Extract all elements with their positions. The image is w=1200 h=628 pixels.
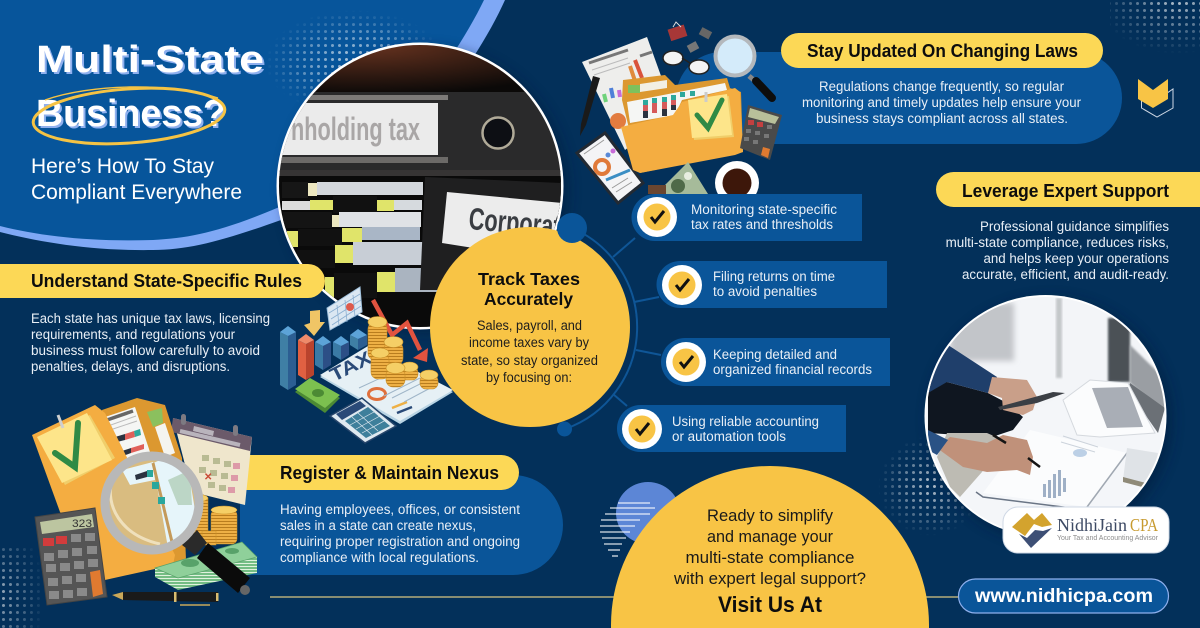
checklist item 2 — [656, 261, 887, 308]
body text: requirements, and regulations your — [31, 327, 235, 342]
heading: Understand State-Specific Rules — [31, 271, 302, 291]
section: Leverage Expert Support — [936, 172, 1200, 282]
coin stacks — [182, 494, 237, 545]
label TAX: TAX — [327, 348, 376, 386]
sticky note — [37, 413, 115, 485]
folder documents — [627, 83, 727, 123]
text: Using reliable accounting — [672, 414, 819, 429]
body text: monitoring and timely updates help ensure your — [802, 95, 1081, 110]
paper stacks — [282, 182, 448, 298]
text: Monitoring state-specific — [691, 202, 837, 217]
calendar: ✕ — [204, 472, 212, 483]
check icon — [662, 265, 702, 305]
folder back — [622, 75, 743, 173]
website pill: www.nidhicpa.com — [974, 585, 1153, 607]
upper sleeve — [926, 345, 997, 393]
checklist item 1 — [632, 194, 862, 241]
lower sleeve — [928, 430, 948, 455]
body text: state, so stay organized — [461, 353, 598, 368]
halftone dots bottom left — [2, 548, 40, 628]
sticky note with check — [688, 94, 734, 140]
heading: Register & Maintain Nexus — [280, 463, 499, 483]
lower hand — [937, 435, 1033, 475]
title: Business? — [36, 93, 226, 135]
calendar — [171, 414, 252, 505]
illustration: tax chart and coins — [280, 287, 453, 443]
coffee cup — [715, 161, 759, 205]
paper clip — [58, 415, 63, 428]
heading: Track Taxes — [478, 269, 580, 289]
pen — [580, 76, 600, 136]
red arrow — [373, 300, 428, 362]
subtitle: Compliant Everywhere — [31, 181, 242, 204]
website pill — [958, 579, 1168, 613]
logo name: NidhiJain — [1057, 515, 1127, 535]
book — [1123, 448, 1158, 489]
magnifying glass — [105, 450, 250, 595]
bills — [295, 378, 340, 413]
body text: compliance with local regulations. — [280, 550, 479, 565]
checklist item 3 — [661, 338, 890, 386]
coin stacks — [368, 316, 438, 389]
body text: Having employees, offices, or consistent — [280, 502, 520, 517]
body text: income taxes vary by — [469, 335, 589, 350]
check icon — [622, 409, 662, 449]
text — [672, 414, 819, 444]
blue panel — [676, 52, 1122, 144]
body text — [802, 79, 1081, 126]
heading: Leverage Expert Support — [962, 181, 1169, 201]
binder label: nholding tax — [291, 111, 420, 147]
desk — [1164, 410, 1165, 415]
check icon — [666, 342, 706, 382]
body text: penalties, delays, and disruptions. — [31, 359, 230, 374]
dark torso — [928, 380, 1023, 437]
heading pill — [936, 172, 1200, 207]
circular photo: hands with laptop — [924, 295, 1170, 540]
calculator — [35, 508, 107, 605]
text: Keeping detailed and — [713, 347, 837, 362]
section: Register and Maintain Nexus — [235, 455, 563, 575]
money and wallet — [648, 162, 708, 194]
cta text — [673, 507, 866, 588]
photo shadow — [928, 298, 1172, 542]
text: Filing returns on time — [713, 269, 835, 284]
body text: business must follow carefully to avoid — [31, 343, 260, 358]
document marks — [359, 376, 436, 413]
subtitle — [31, 155, 242, 204]
yellow down arrow — [304, 310, 325, 336]
text: organized financial records — [713, 362, 872, 377]
text: to avoid penalties — [713, 284, 817, 299]
tax document — [320, 348, 453, 424]
binder ring — [482, 118, 514, 148]
folder front — [32, 405, 175, 580]
folder tab labels — [628, 80, 667, 93]
second binder: Corporat — [467, 201, 562, 244]
logo tagline: Your Tax and Accounting Advisor — [1057, 535, 1159, 542]
text: or automation tools — [672, 429, 786, 444]
phone — [998, 392, 1065, 410]
text — [691, 202, 837, 232]
header curved light band — [0, 0, 505, 250]
binder label — [278, 103, 438, 155]
calculator: 323 — [72, 518, 92, 530]
second binder — [420, 177, 562, 290]
money stack — [155, 542, 257, 590]
logo badge — [1003, 507, 1169, 553]
body text — [946, 219, 1169, 282]
illustration: folder, calendar, magnifier — [32, 398, 257, 605]
grid card — [327, 287, 362, 330]
calculator — [740, 105, 782, 160]
heading pill — [0, 264, 325, 298]
body text — [461, 318, 598, 385]
halftone dots near photo — [884, 443, 970, 530]
body text: requiring proper registration and ongoing — [280, 534, 520, 549]
calculator — [330, 398, 396, 443]
chart paper — [582, 37, 674, 150]
binder clips — [668, 22, 712, 53]
body text: Regulations change frequently, so regular — [819, 79, 1064, 94]
logo CPA: CPA — [1130, 515, 1158, 535]
laptop — [1063, 380, 1165, 437]
heading — [478, 269, 580, 309]
blue panel — [240, 475, 563, 575]
trousers — [937, 433, 996, 497]
body text: Professional guidance simplifies — [980, 219, 1169, 234]
logo mark — [1012, 513, 1052, 548]
connector ring — [565, 228, 661, 429]
body text: business stays compliant across all states. — [816, 111, 1068, 126]
body text: sales in a state can create nexus, — [280, 518, 476, 533]
heading: Accurately — [484, 289, 573, 309]
center yellow circle: Track Taxes — [430, 213, 630, 436]
body text: Each state has unique tax laws, licensing — [31, 311, 270, 326]
glasses — [663, 51, 709, 74]
cta text: Ready to simplify — [707, 507, 834, 525]
halftone dots top right — [1110, 2, 1200, 47]
cta text: and manage your — [707, 528, 833, 546]
upper hand — [988, 377, 1037, 415]
call to action circle — [611, 466, 929, 628]
text — [713, 269, 835, 299]
heading pill — [235, 455, 519, 490]
visit us: Visit Us At — [718, 592, 823, 617]
yellow scribble around Business — [31, 82, 227, 150]
body text: accurate, efficient, and audit-ready. — [962, 267, 1169, 282]
chevron badge icon — [1138, 79, 1173, 117]
footer rule — [270, 596, 960, 598]
cta text: with expert legal support? — [673, 570, 866, 588]
check icon — [637, 197, 677, 237]
body text: multi-state compliance, reduces risks, — [946, 235, 1169, 250]
body text — [280, 502, 520, 565]
section: Understand State-Specific Rules — [0, 264, 325, 374]
heading pill — [781, 33, 1103, 68]
tablet report — [577, 133, 643, 203]
header blue panel — [0, 0, 484, 240]
body text — [31, 311, 270, 374]
title: Multi-State — [36, 39, 264, 81]
striped bubble — [600, 482, 680, 556]
ring dot bottom — [557, 422, 572, 436]
body text: Sales, payroll, and — [477, 318, 582, 333]
halftone dots top — [269, 16, 431, 102]
pen — [993, 435, 1040, 467]
title — [36, 39, 264, 135]
folder documents — [105, 407, 175, 465]
section: Stay Updated On Changing Laws — [676, 33, 1122, 144]
checklist item 4 — [617, 405, 846, 452]
circular photo: binders — [276, 42, 564, 331]
text: tax rates and thresholds — [691, 217, 833, 232]
notebook — [976, 436, 1126, 506]
illustration: folder with documents — [577, 22, 782, 205]
text — [713, 347, 872, 377]
folder front — [621, 88, 743, 173]
cta text: multi-state compliance — [686, 549, 854, 567]
body text: and helps keep your operations — [984, 251, 1169, 266]
blurred background — [950, 298, 1166, 415]
subtitle: Here’s How To Stay — [31, 155, 214, 178]
magnifying glass — [716, 36, 772, 98]
ring dot top — [557, 213, 587, 243]
paper clip — [704, 92, 708, 102]
heading: Stay Updated On Changing Laws — [807, 41, 1078, 61]
bars — [280, 326, 367, 390]
folder back — [102, 398, 186, 575]
shadow behind left photo — [283, 47, 569, 333]
pen — [112, 592, 218, 605]
body text: by focusing on: — [486, 370, 572, 385]
